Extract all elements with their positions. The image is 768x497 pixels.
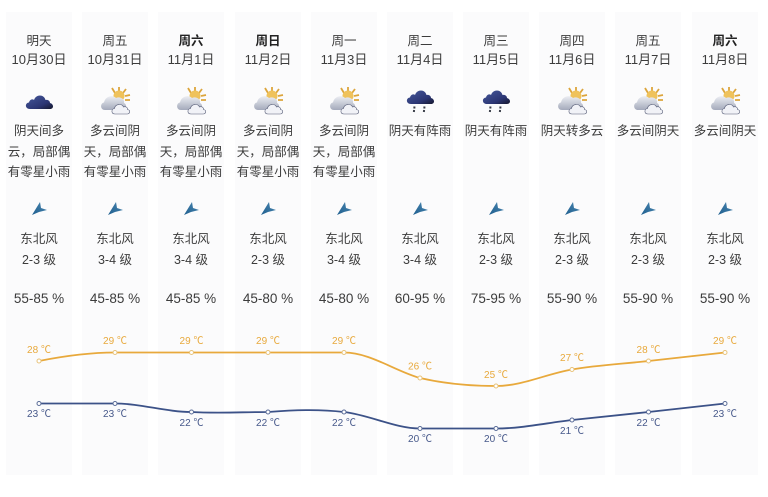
panel: day 4 [235,12,301,475]
humidity: 45-80 % [243,291,293,306]
condition: 天，局部偶 [160,144,222,158]
icon: wind direction [718,202,733,215]
icon: partly cloudy [254,87,284,114]
icon: overcast [26,96,53,109]
low temperature series: 22 ℃ [637,418,660,429]
high temperature series: 29 ℃ [256,336,280,347]
panel: day 10 [692,12,758,475]
icon: wind direction [108,202,123,215]
low temperature series: 22 ℃ [256,418,280,429]
humidity: 55-85 % [14,291,64,306]
date: 11月6日 [549,52,595,67]
day label: 周五 [635,34,660,48]
high temperature series: 26 ℃ [408,362,432,372]
low temperature series: 21 ℃ [560,426,584,437]
wind: 2-3 级 [631,253,665,267]
condition: 阴天有阵雨 [465,124,527,138]
low temperature series: 20 ℃ [408,434,432,445]
high temperature series: 29 ℃ [713,336,737,347]
panel: day 8 [539,12,605,475]
panel: day 9 [615,12,681,475]
wind: 东北风 [477,232,515,246]
humidity: 55-90 % [547,291,597,306]
high temperature series: 28 ℃ [27,345,51,356]
date: 11月5日 [473,52,519,67]
condition: 天，局部偶 [313,144,375,158]
condition: 有零星小雨 [160,165,222,179]
wind [96,232,134,267]
condition: 多云间阴天 [617,124,679,138]
icon: wind direction [489,202,504,215]
date: 11月4日 [397,52,443,67]
wind [706,232,744,267]
panel: day 5 [311,12,377,475]
wind: 3-4 级 [98,253,132,267]
condition [237,124,299,179]
wind [325,232,363,267]
wind: 东北风 [706,232,744,246]
wind: 3-4 级 [403,253,437,267]
wind [172,232,210,267]
icon: partly cloudy [558,87,588,114]
icon: showers [482,90,510,112]
wind: 东北风 [20,232,58,246]
humidity: 45-80 % [319,291,369,306]
condition: 云，局部偶 [8,144,70,158]
icon: partly cloudy [177,87,206,114]
date: 10月31日 [88,52,142,67]
wind: 东北风 [401,232,439,246]
condition [84,124,146,179]
humidity: 55-90 % [623,291,673,306]
wind: 东北风 [325,232,363,246]
date: 11月7日 [625,52,671,67]
panel: day 2 [82,12,148,475]
panel: day 7 [463,12,529,475]
day label: 周二 [407,34,432,48]
icon: wind direction [184,202,199,215]
condition [313,124,375,179]
condition: 有零星小雨 [313,165,375,179]
wind: 3-4 级 [327,253,361,267]
date: 11月2日 [245,52,291,67]
icon: wind direction [641,202,656,215]
humidity: 45-85 % [90,291,140,306]
condition: 多云间阴 [243,124,293,138]
wind: 东北风 [172,232,210,246]
wind [20,232,58,267]
high temperature series: 25 ℃ [484,370,508,381]
icon: wind direction [413,202,428,215]
high temperature series: 29 ℃ [180,336,203,347]
humidity: 55-90 % [700,291,750,306]
wind [249,232,287,267]
condition: 多云间阴 [90,124,140,138]
day label: 周六 [712,34,738,48]
wind: 3-4 级 [174,253,208,267]
condition: 阴天间多 [14,124,64,138]
condition: 天，局部偶 [84,144,146,158]
low temperature series: 22 ℃ [180,418,203,429]
condition: 多云间阴 [166,124,216,138]
icon: wind direction [565,202,580,215]
high temperature series [27,336,737,388]
day label: 周一 [331,34,356,48]
day label: 明天 [26,34,52,48]
wind: 东北风 [96,232,134,246]
wind: 东北风 [553,232,591,246]
low temperature series: 22 ℃ [332,418,356,429]
low temperature series: 23 ℃ [713,409,737,420]
panel: day 1 [6,12,72,475]
high temperature series: 27 ℃ [560,353,584,364]
panel: day 6 [387,12,453,475]
condition: 阴天有阵雨 [389,124,451,138]
condition: 阴天转多云 [541,124,603,138]
icon: partly cloudy [101,87,130,114]
condition: 多云间阴天 [694,124,756,138]
day label: 周三 [483,34,508,48]
low temperature series [27,402,737,445]
humidity: 60-95 % [395,291,445,306]
icon: wind direction [261,202,276,215]
condition: 有零星小雨 [84,165,146,179]
wind: 2-3 级 [555,253,589,267]
condition: 有零星小雨 [8,165,70,179]
wind [477,232,515,267]
condition: 天，局部偶 [237,144,299,158]
humidity: 45-85 % [166,291,216,306]
wind: 2-3 级 [251,253,285,267]
condition [160,124,222,179]
wind [401,232,439,267]
icon: partly cloudy [330,87,360,114]
icon: showers [406,90,434,112]
wind: 东北风 [249,232,287,246]
condition: 多云间阴 [319,124,369,138]
condition [8,124,70,179]
low temperature series: 23 ℃ [103,409,127,420]
panel: day 3 [158,12,224,475]
high temperature series: 29 ℃ [332,336,356,347]
date: 11月8日 [702,52,748,67]
day label: 周四 [559,34,584,48]
date: 10月30日 [12,52,66,67]
wind: 2-3 级 [708,253,742,267]
icon: partly cloudy [634,87,664,114]
date: 11月3日 [321,52,367,67]
wind: 2-3 级 [479,253,513,267]
humidity: 75-95 % [471,291,521,306]
icon: wind direction [337,202,352,215]
wind [629,232,667,267]
icon: wind direction [32,202,47,215]
low temperature series: 23 ℃ [27,409,51,420]
high temperature series: 29 ℃ [103,336,127,347]
wind [553,232,591,267]
date: 11月1日 [168,52,214,67]
wind: 东北风 [629,232,667,246]
low temperature series: 20 ℃ [484,434,508,445]
day label: 周六 [178,34,204,48]
day label: 周日 [255,34,280,48]
high temperature series: 28 ℃ [637,345,660,356]
day label: 周五 [102,34,128,48]
icon: partly cloudy [711,87,740,114]
wind: 2-3 级 [22,253,56,267]
condition: 有零星小雨 [237,165,299,179]
